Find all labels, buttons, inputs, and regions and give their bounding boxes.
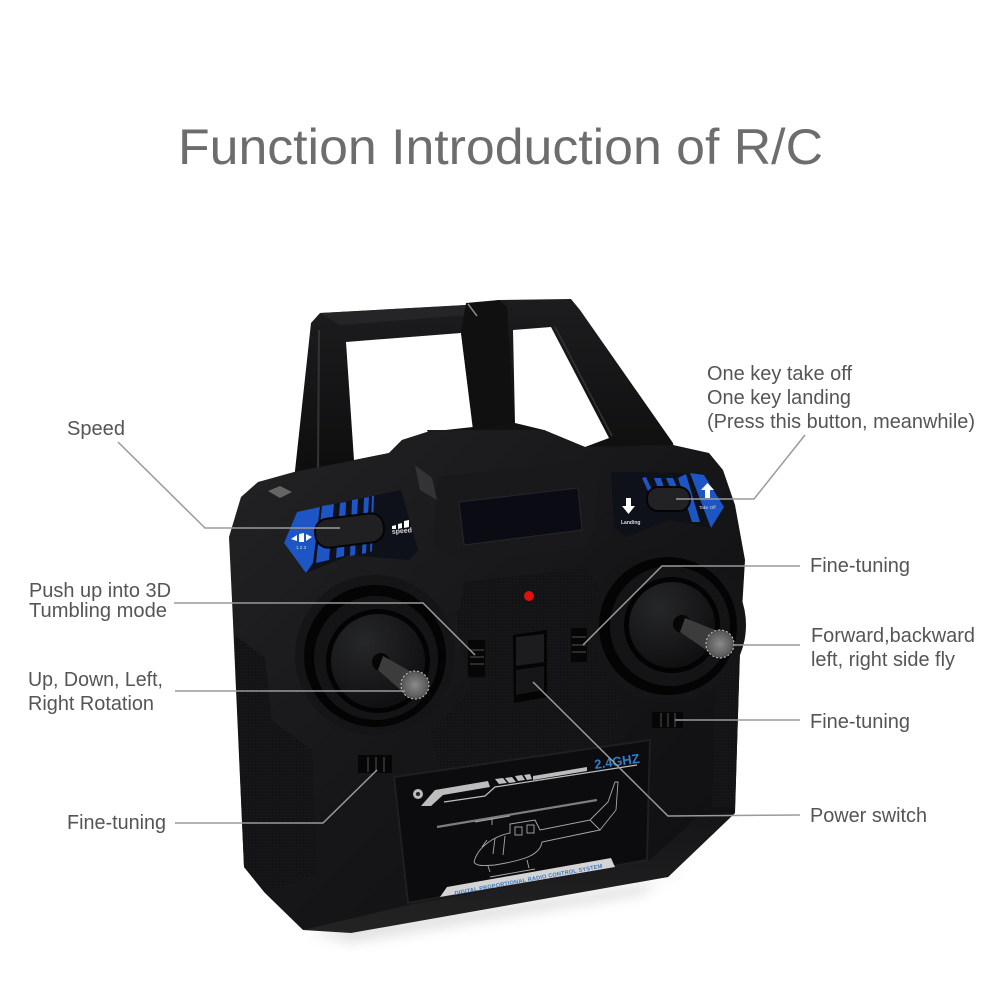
status LED bbox=[456, 568, 599, 640]
remote controller bbox=[229, 299, 746, 943]
label: fine-tuning left: Fine-tuning bbox=[67, 812, 166, 834]
right vertical trim bbox=[571, 628, 587, 662]
sticker dot bbox=[413, 789, 423, 799]
label: forward backward bbox=[811, 625, 975, 671]
speed panel bbox=[284, 490, 418, 573]
right grip bbox=[712, 650, 740, 808]
bottom right trim bbox=[652, 712, 683, 728]
title: Function Introduction of R/C bbox=[178, 119, 823, 175]
helicopter sticker panel bbox=[394, 740, 650, 903]
centre textured plate bbox=[430, 600, 623, 770]
right stick bbox=[590, 547, 746, 703]
take off panel bbox=[611, 472, 724, 537]
left grip bbox=[234, 635, 318, 893]
ground shadow bbox=[310, 862, 690, 943]
mode icon: 1 2 3 bbox=[296, 545, 307, 550]
label: one key take off: One key landing bbox=[707, 387, 851, 409]
right stick shaft bbox=[673, 615, 734, 658]
label: fine-tuning upper right: Fine-tuning bbox=[810, 555, 910, 577]
label: speed: Speed bbox=[67, 418, 125, 440]
helicopter outline bbox=[437, 782, 618, 877]
main body bbox=[229, 430, 745, 933]
label: one key take off: One key take off bbox=[707, 363, 852, 385]
label: rotation: Right Rotation bbox=[28, 693, 154, 715]
2.4GHZ label: 2.4GHZ bbox=[593, 751, 641, 772]
speed slider bbox=[314, 512, 386, 549]
bottom left trim bbox=[358, 755, 392, 773]
power switch bbox=[513, 630, 547, 703]
carrying handle bbox=[294, 299, 680, 480]
left stick shaft bbox=[372, 653, 429, 699]
left vertical trim bbox=[468, 640, 485, 677]
LCD screen bbox=[459, 488, 582, 545]
label: rotation: Up, Down, Left, bbox=[28, 669, 163, 691]
landing arrow icon: Landing bbox=[621, 520, 640, 526]
label: one key take off bbox=[707, 363, 975, 433]
label: power switch: Power switch bbox=[810, 805, 927, 827]
take off arrow icon: Take Off bbox=[699, 505, 716, 510]
callout lines bbox=[118, 435, 805, 823]
take off button bbox=[647, 487, 690, 511]
label: forward backward: Forward,backward bbox=[811, 625, 975, 647]
left stick bbox=[295, 575, 455, 735]
label: rotation bbox=[28, 669, 163, 715]
label: 3D tumbling bbox=[29, 580, 171, 622]
label: forward backward: left, right side fly bbox=[811, 649, 955, 671]
label: 3D tumbling: Push up into 3D bbox=[29, 580, 171, 602]
speed label icon: speed bbox=[392, 527, 412, 536]
label: one key take off: (Press this button, meanwhile) bbox=[707, 411, 975, 433]
sticker speed stripes bbox=[421, 765, 637, 806]
system strip: DIGITAL PROPORTIONAL RADIO CONTROL SYSTEM bbox=[454, 864, 603, 897]
label: 3D tumbling: Tumbling mode bbox=[29, 600, 167, 622]
label: fine-tuning lower right: Fine-tuning bbox=[810, 711, 910, 733]
handle centre strap bbox=[427, 300, 545, 448]
